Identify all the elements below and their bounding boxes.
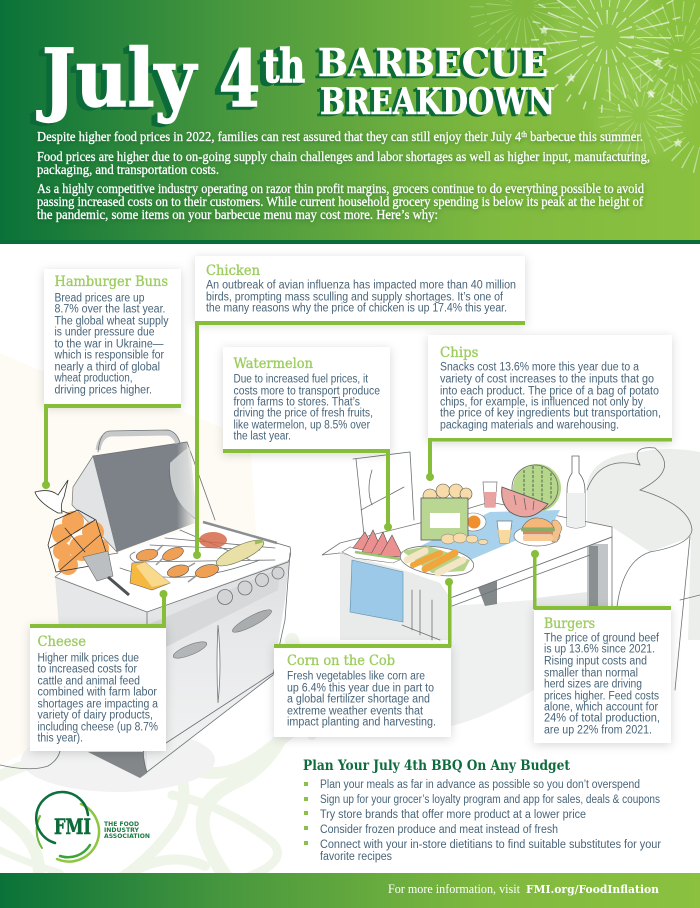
- card: Burgers: 24% of total production,: [544, 712, 660, 724]
- card: Cheese: cattle and animal feed: [38, 676, 140, 688]
- budget tips list: Try store brands that offer more product at a lower price: [320, 809, 586, 821]
- card: Watermelon: from farms to stores. That’s: [234, 396, 360, 408]
- FMI logo: [36, 792, 150, 861]
- illustration: steak: [199, 532, 227, 548]
- card: Corn on the Cob: extreme weather events that: [287, 706, 424, 718]
- fireworks: [477, 0, 700, 161]
- card: Chips: packaging materials and warehousing.: [440, 420, 619, 432]
- card: Chips: the price of key ingredients but transportation,: [440, 408, 661, 420]
- card: Burgers: are up 22% from 2021.: [544, 724, 652, 736]
- illustration: corn plate: [398, 542, 476, 580]
- card: Corn on the Cob: Fresh vegetables like corn are: [287, 670, 425, 682]
- illustration: burger plate: [514, 518, 562, 546]
- card: Hamburger Buns: is under pressure due: [54, 326, 154, 338]
- card: Chicken: An outbreak of avian influenza has impacted more than 40 million: [206, 280, 516, 292]
- budget tips heading: Plan Your July 4th BBQ On Any Budget: [303, 758, 571, 774]
- title: July 4th: [37, 31, 305, 125]
- card: Chips: variety of cost increases to the inputs that go: [440, 374, 654, 386]
- illustration: drinks: [483, 482, 512, 543]
- card: Corn on the Cob: Corn on the Cob: [287, 653, 395, 669]
- intro text: Food prices are higher due to on-going supply chain challenges and labor shortages as well as higher input, manufacturing,: [37, 149, 650, 164]
- illustration: watermelon slices: [342, 530, 404, 563]
- card: Hamburger Buns: to the war in Ukraine—: [54, 338, 164, 350]
- title: July 4th: 4: [219, 34, 260, 125]
- card: Cheese: variety of dairy products,: [38, 710, 153, 722]
- card: Corn on the Cob: [274, 578, 453, 737]
- card: Watermelon: like watermelon, up 8.5% over: [234, 420, 370, 432]
- intro text: packaging, and transportation costs.: [37, 162, 219, 177]
- card: Chicken: the many reasons why the price of chicken is up 17.4% this year.: [206, 302, 507, 314]
- card: Chips: Snacks cost 13.6% more this year due to a: [440, 362, 640, 374]
- illustration: watermelon: [502, 464, 561, 517]
- illustration: table chair: [353, 452, 414, 535]
- card: Burgers: is up 13.6% since 2021.: [544, 644, 655, 656]
- intro text: the pandemic, some items on your barbecue menu may cost more. Here’s why:: [37, 207, 438, 222]
- card: Burgers: herd sizes are driving: [544, 678, 642, 690]
- card: Corn on the Cob: impact planting and harvesting.: [287, 716, 436, 728]
- FMI logo: THE FOOD: [104, 821, 139, 828]
- illustration: table: [322, 502, 612, 640]
- card: Chicken: Chicken: [206, 263, 260, 279]
- card: Hamburger Buns: [42, 269, 181, 489]
- illustration: basting brush: [83, 551, 129, 595]
- footer band: [0, 873, 700, 908]
- card: Hamburger Buns: nearly a third of global: [54, 362, 160, 374]
- intro text: Despite higher food prices in 2022, families can rest assured that they can still enjoy their July 4: [37, 129, 557, 144]
- card: Hamburger Buns: Hamburger Buns: [54, 274, 168, 290]
- card: Watermelon: costs more to transport produce: [234, 386, 380, 398]
- illustration: grill: [0, 430, 291, 778]
- card: Hamburger Buns: Bread prices are up: [54, 292, 144, 304]
- illustration: cheese: [130, 562, 170, 590]
- card: Cheese: shortages are impacting a: [38, 698, 159, 710]
- title: Barbecue Breakdown: BARBECUE: [318, 40, 548, 85]
- illustration: bag of buns: [35, 480, 109, 575]
- header band: [0, 0, 700, 244]
- title: July 4th: th: [263, 39, 305, 93]
- card: Burgers: Rising input costs and: [544, 656, 647, 668]
- intro text: th: [521, 130, 527, 139]
- card: Watermelon: Watermelon: [234, 356, 313, 372]
- illustration: bottle: [567, 456, 585, 528]
- card: Corn on the Cob: up 6.4% this year due in part to: [287, 682, 434, 694]
- card: Burgers: The price of ground beef: [544, 632, 660, 644]
- FMI logo: FMI: [54, 814, 91, 839]
- card: Chips: into each product. The price of a bag of potato: [440, 386, 659, 398]
- card: Watermelon: the last year.: [234, 430, 291, 442]
- card: Chips: chips, for example, is influenced not only by: [440, 396, 643, 408]
- title: Barbecue Breakdown: [318, 40, 555, 123]
- card: Watermelon: Due to increased fuel prices, it: [234, 374, 369, 386]
- card: Chicken: [193, 256, 525, 559]
- card: Corn on the Cob: a global fertilizer shortage and: [287, 694, 430, 706]
- footer band: FMI.org/FoodInflation: [526, 883, 659, 896]
- FMI logo: ASSOCIATION: [104, 833, 150, 840]
- card: Cheese: Cheese: [38, 634, 86, 650]
- chair and patio background, right: [451, 448, 700, 726]
- budget tips list: [304, 779, 661, 863]
- illustration: chips bag: [421, 484, 488, 544]
- illustration: chicken legs: [135, 545, 220, 582]
- card: Cheese: combined with farm labor: [38, 686, 157, 698]
- title: Barbecue Breakdown: BREAKDOWN: [320, 81, 555, 123]
- card: Hamburger Buns: wheat production,: [54, 372, 132, 384]
- budget tips list: Connect with your in-store dietitians to find suitable substitutes for your: [320, 839, 661, 851]
- card: Cheese: Higher milk prices due: [38, 652, 139, 664]
- card: Chicken: birds, prompting mass sculling and supply shortages. It’s one of: [206, 292, 504, 304]
- card: Chips: Chips: [440, 345, 479, 361]
- title: July 4th: July: [37, 31, 198, 125]
- card: Cheese: including cheese (up 8.7%: [38, 722, 158, 734]
- background: cream wall shape: [0, 353, 258, 765]
- footer band: For more information, visit: [388, 881, 520, 896]
- card: Hamburger Buns: which is responsible for: [54, 350, 164, 362]
- budget tips list: Sign up for your grocer’s loyalty program and app for sales, deals & coupons: [320, 794, 660, 806]
- card: Burgers: alone, which account for: [544, 702, 658, 714]
- intro text: passing increased costs on to their customers. While current household grocery spending is below its peak at the height of: [37, 194, 643, 209]
- budget tips list: Consider frozen produce and meat instead of fresh: [320, 824, 558, 836]
- budget tips list: favorite recipes: [320, 851, 392, 863]
- card: Hamburger Buns: driving prices higher.: [54, 384, 152, 396]
- card: Cheese: this year).: [38, 732, 83, 744]
- card: Hamburger Buns: The global wheat supply: [54, 316, 169, 328]
- background: pale green leaf pattern: [0, 640, 314, 880]
- card: Chips: [426, 335, 672, 481]
- intro text: barbecue this summer.: [527, 129, 643, 144]
- card: Burgers: Burgers: [544, 616, 595, 632]
- grill floor shadow: [21, 728, 215, 792]
- card: Cheese: to increased costs for: [38, 664, 137, 676]
- card: Watermelon: [223, 347, 392, 531]
- intro text: As a highly competitive industry operating on razor thin profit margins, grocers continue to do everything possible to avoid: [37, 181, 644, 196]
- FMI logo: INDUSTRY: [104, 827, 140, 834]
- card: Hamburger Buns: 8.7% over the last year.: [54, 304, 166, 316]
- budget tips list: Plan your meals as far in advance as possible so you don’t overspend: [320, 779, 640, 791]
- card: Burgers: smaller than normal: [544, 668, 638, 680]
- card: Watermelon: driving the price of fresh fruits,: [234, 408, 373, 420]
- illustration: corn on grill: [213, 535, 267, 571]
- card: Burgers: prices higher. Feed costs: [544, 690, 659, 702]
- intro text: [37, 129, 650, 222]
- card: Cheese: [30, 590, 168, 751]
- card: Burgers: [531, 550, 671, 743]
